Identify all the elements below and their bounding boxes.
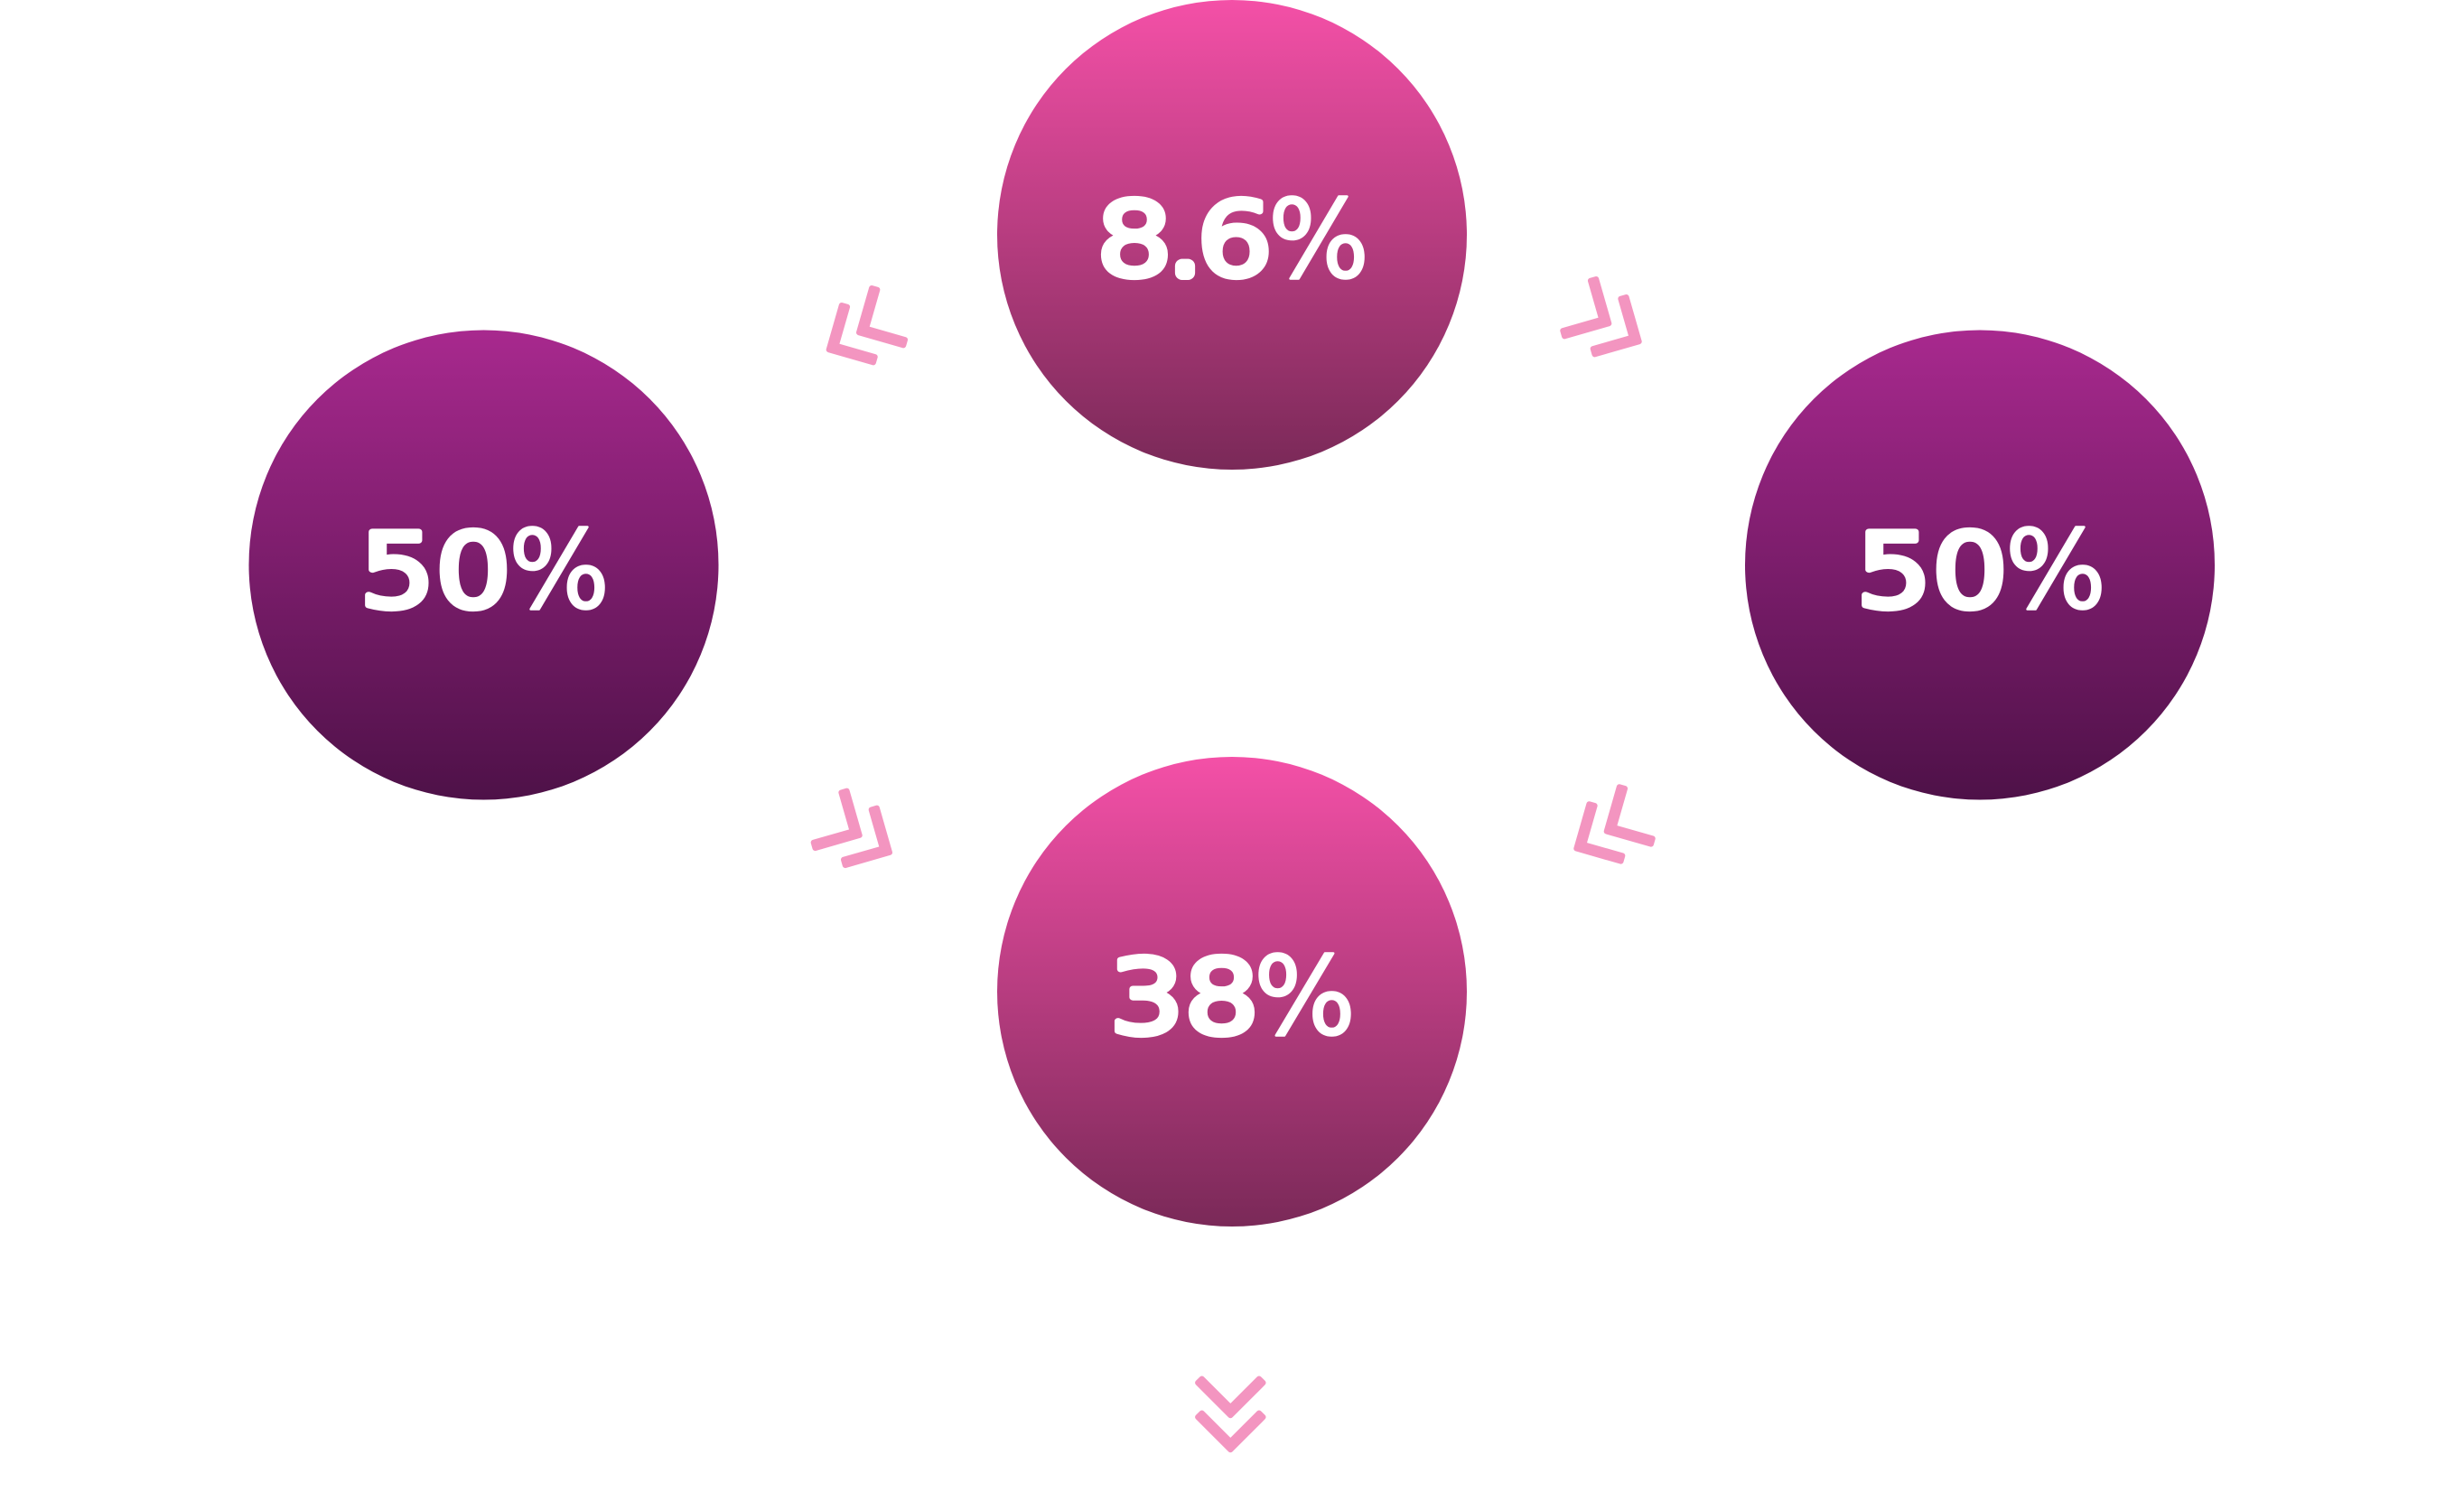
arrow: top-right chevrons xyxy=(1552,279,1639,354)
left circle: 50% xyxy=(249,331,719,800)
top circle: 8.6%: 6 xyxy=(1197,180,1273,300)
bottom circle: 38%: 38 xyxy=(1109,937,1259,1058)
bottom circle: 38%: % xyxy=(1254,935,1356,1060)
arrow: top-left chevrons xyxy=(829,288,916,362)
bottom circle: 38% xyxy=(997,757,1467,1227)
arrow: bottom-right chevrons xyxy=(1576,787,1664,862)
top circle: 8.6%: % xyxy=(1268,178,1369,303)
left circle: 50%: 50 xyxy=(359,511,511,631)
right circle: 50%: % xyxy=(2005,508,2106,634)
right circle: 50% xyxy=(1745,331,2215,800)
top circle: 8.6%: 8 xyxy=(1097,180,1172,300)
right circle: 50%: 50 xyxy=(1856,511,2008,631)
top circle: 8.6% xyxy=(997,0,1467,470)
top circle: 8.6%: . xyxy=(1176,223,1194,286)
arrow: bottom-left chevrons xyxy=(802,791,890,865)
arrow: bottom down chevrons xyxy=(1198,1350,1264,1450)
left circle: 50%: % xyxy=(509,508,610,634)
